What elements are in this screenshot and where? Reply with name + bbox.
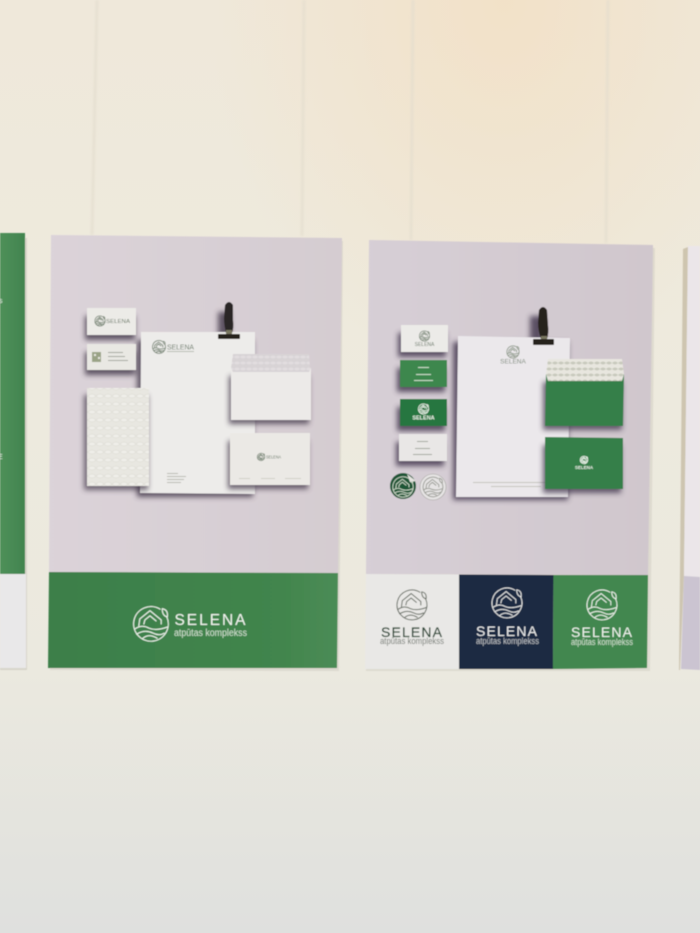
logo tile: white [365, 574, 459, 669]
letterhead [140, 332, 255, 494]
envelope open [229, 354, 311, 424]
sticker white [420, 474, 446, 500]
letterhead [456, 336, 570, 497]
logo tile: green [553, 575, 648, 669]
card white logo [401, 325, 448, 352]
patterned folder [84, 388, 149, 490]
logo tile: navy: SELENA [476, 623, 538, 639]
poster A logo [134, 607, 247, 641]
poster A: white stationery [48, 235, 343, 671]
sticker green [390, 473, 416, 499]
card dark green logo: SELENA [412, 416, 435, 422]
logo tile: white: SELENA [381, 624, 443, 640]
right partial poster [679, 246, 700, 670]
poster A logo: SELENA [174, 612, 246, 629]
logo tile: white: atpūtas komplekss [380, 636, 445, 646]
logo tile: navy [459, 574, 554, 669]
letterhead: SELENA [500, 358, 526, 366]
poster B: green stationery [365, 240, 655, 671]
business card back with QR [87, 344, 136, 370]
card green contacts [400, 360, 447, 387]
card white contacts [399, 434, 447, 461]
envelope green closed: SELENA [575, 465, 594, 470]
letterhead: SELENA [167, 342, 194, 352]
business card front [87, 308, 136, 335]
logo tile: green: atpūtas komplekss [571, 637, 634, 647]
envelope green closed [543, 437, 623, 493]
poster B shadows [396, 316, 568, 500]
poster A shadows [85, 312, 253, 497]
paper clamp [533, 307, 554, 345]
poster A logo: atpūtas komplekss [174, 628, 247, 639]
left partial poster [0, 233, 27, 670]
partial poster text marks [0, 298, 3, 461]
poster A lilac background [49, 235, 342, 573]
paper clamp [218, 302, 240, 339]
poster A green footer [48, 572, 338, 668]
envelope closed [228, 433, 310, 489]
card dark green logo [400, 399, 447, 426]
logo tile: green: SELENA [571, 624, 633, 640]
card white logo: SELENA [415, 342, 435, 348]
business card front: SELENA [106, 319, 130, 325]
envelope closed: SELENA [266, 454, 281, 460]
logo tile: navy: atpūtas komplekss [476, 636, 540, 646]
envelope green open [543, 359, 624, 430]
poster B lilac background [366, 240, 653, 575]
